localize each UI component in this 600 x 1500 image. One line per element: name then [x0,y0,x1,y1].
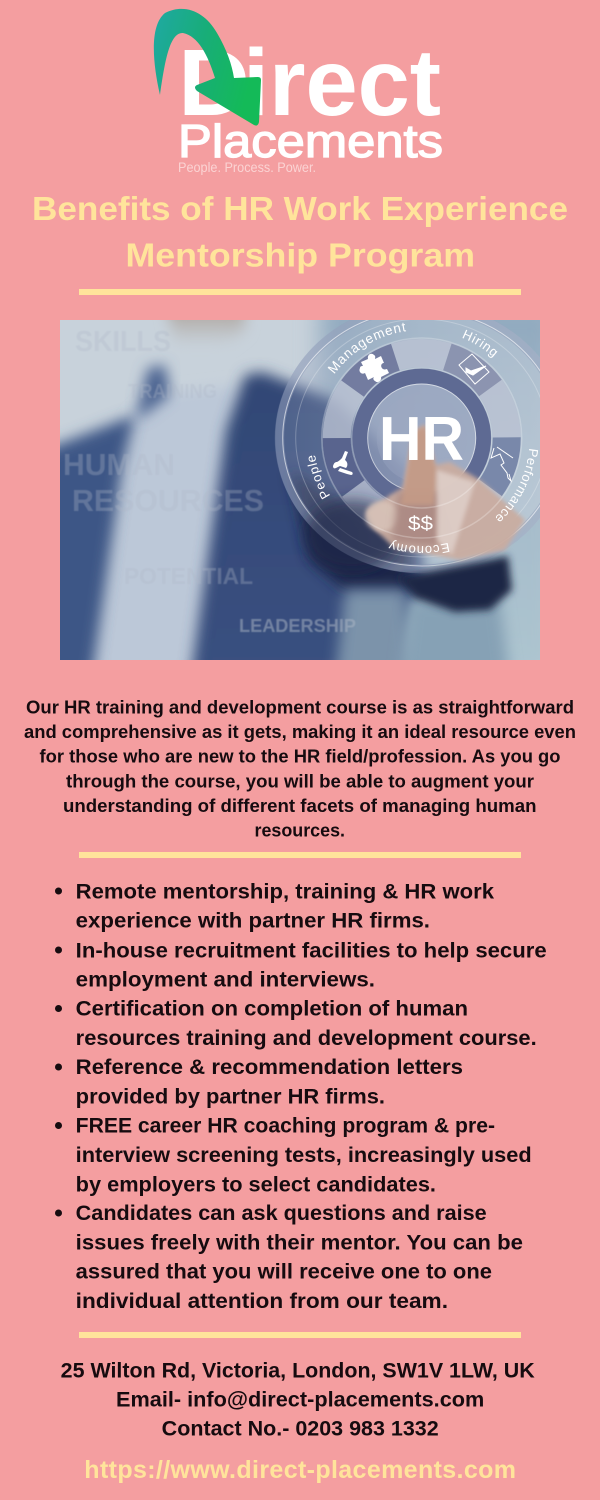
logo: Direct Placements [154,9,443,175]
icon: people figure [333,451,353,475]
intro paragraph: understanding of different facets of managing human [63,796,536,816]
knuckle highlight [365,501,399,531]
bullet: free coaching: interview screening tests, increasingly used [76,1144,532,1167]
bullet: certification [55,998,537,1050]
intro paragraph: and comprehensive as it gets, making it an ideal resource even [24,722,576,742]
contact details: Email- info@direct-placements.com [116,1389,484,1412]
icon: hiring checkbox [459,354,489,384]
bullet: reference letters: Reference & recommendation letters [76,1056,463,1079]
logo tagline: People. Process. Power. [178,160,316,175]
HR dial [274,320,540,574]
bullet: reference letters [55,1056,463,1108]
overlay word: RESOURCES: RESOURCES [72,483,264,518]
title: Benefits of HR Work Experience [32,190,568,227]
intro paragraph: through the course, you will be able to augment your [66,771,534,791]
intro paragraph [24,697,576,841]
icon: green curved arrow [154,9,261,126]
bullet: candidates: assured that you will receive one to one [76,1261,492,1284]
contact details: 25 Wilton Rd, Victoria, London, SW1V 1LW, UK [61,1359,535,1382]
bullet: in-house recruitment: employment and interviews. [76,969,375,992]
dial arcs over hand [322,338,522,538]
hand pointing [365,424,525,612]
bullet: candidates: individual attention from our team. [76,1290,448,1313]
hand [367,424,525,560]
label: Management: Management [328,322,406,374]
bullet: in-house recruitment [55,939,547,992]
bullet: free coaching [55,1115,532,1196]
dial dark segments [322,344,521,497]
contact details [61,1359,535,1440]
blurred businessman background [60,320,540,660]
bullet: remote mentorship: experience with partner HR firms. [76,910,430,933]
bullet: certification: Certification on completion of human [76,998,468,1021]
overlay word: HUMAN: HUMAN [63,447,175,482]
icon: puzzle piece [359,354,389,382]
bullet: reference letters: provided by partner HR firms. [76,1086,385,1108]
overlay word: LEADERSHIP: LEADERSHIP [239,616,356,636]
bullet: remote mentorship [55,880,494,933]
dial outer band [274,320,540,573]
bullet: remote mentorship: Remote mentorship, training & HR work [76,880,494,903]
intro paragraph: for those who are new to the HR field/profession. As you go [40,747,561,767]
folded finger highlight [437,470,475,555]
label: Hiring: Hiring [462,330,498,358]
contact details: Contact No.- 0203 983 1332 [162,1417,439,1440]
bullet: candidates: issues freely with their mentor. You can be [76,1231,523,1254]
sleeve cuff [398,556,512,612]
title [32,190,568,274]
overlay word: TRAINING: TRAINING [128,381,217,403]
label: Performance: Performance [496,449,538,522]
bullet: candidates: Candidates can ask questions and raise [76,1202,487,1225]
bullet: in-house recruitment: In-house recruitment facilities to help secure [76,939,547,962]
label: Economy: Economy [388,540,450,554]
overlay word: SKILLS: SKILLS [75,326,171,358]
dollar text: $$ [408,514,434,535]
bullet: candidates [55,1202,523,1313]
bullet: certification: resources training and development course. [76,1027,537,1050]
bullet: free coaching: by employers to select candidates. [76,1173,436,1196]
bullet: free coaching: FREE career HR coaching program & pre- [76,1115,495,1138]
logo wordmark: irect: irect [243,30,441,136]
photo: HR touch interface [60,320,540,660]
HR big text: HR [379,405,464,474]
title: Mentorship Program [126,236,475,274]
overlay word: POTENTIAL: POTENTIAL [124,563,253,589]
intro paragraph: Our HR training and development course is as straightforward [26,697,574,717]
intro paragraph: resources. [254,821,345,841]
dial light ring [337,353,507,523]
dial inner dark ring [360,376,484,500]
logo wordmark: Direct initial: D [178,30,250,136]
logo wordmark: Placements: Placements [178,115,443,167]
palm shadow [392,492,440,548]
label: People: People [308,456,330,500]
icon: performance chart arrow [491,447,513,481]
index finger shading [400,426,436,505]
benefits bullet list [55,880,547,1313]
website URL: https://www.direct-placements.com [84,1456,516,1484]
arm shadow over lower-left of dial [304,499,400,571]
